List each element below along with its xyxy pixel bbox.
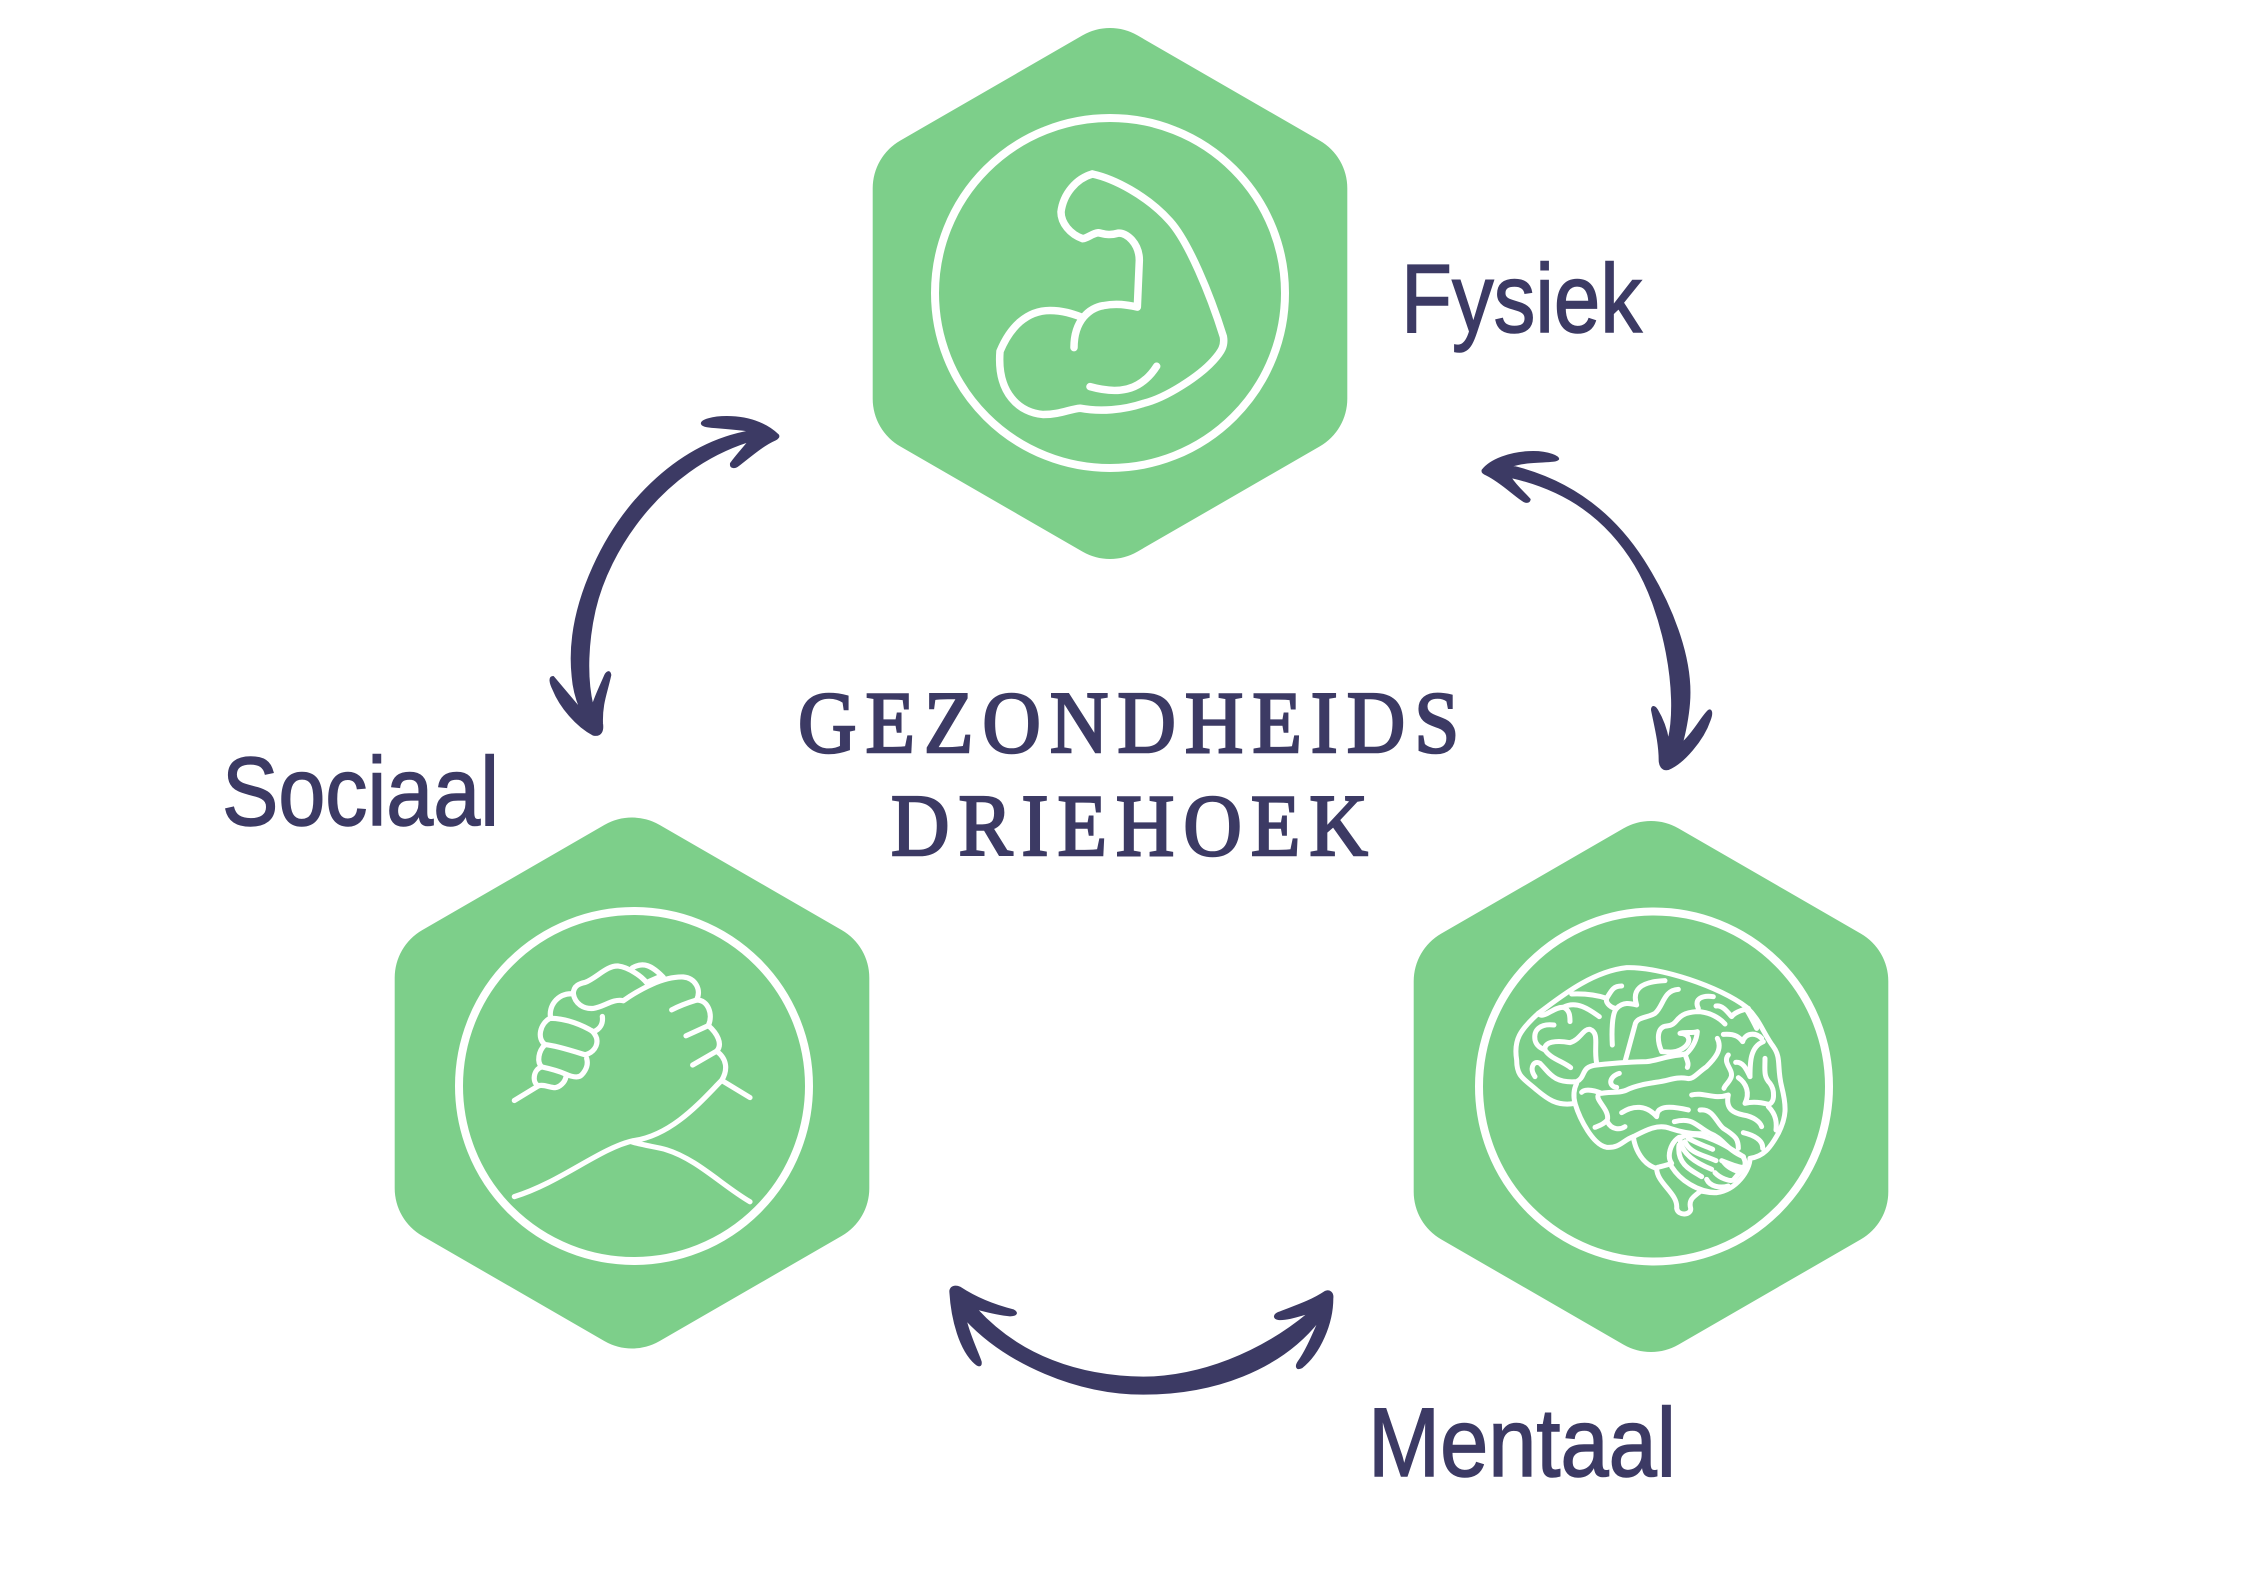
panel: Mentaal <box>1414 821 1888 1352</box>
hexagon: Sociaal <box>395 818 869 1348</box>
hexagon: Fysiek <box>873 28 1347 559</box>
title <box>798 675 1468 875</box>
label: Fysiek: Fysiek <box>1401 244 1642 353</box>
title line 2: DRIEHOEK <box>891 778 1377 875</box>
icon: clasped hands <box>514 965 750 1202</box>
panel: Fysiek <box>873 28 1347 559</box>
icon: flexed muscle arm <box>1000 174 1224 415</box>
title line 1: GEZONDHEIDS <box>798 675 1468 772</box>
panel: Sociaal <box>395 818 869 1348</box>
arrow: Sociaal to Fysiek <box>550 417 779 735</box>
ring: Fysiek <box>935 118 1285 468</box>
ring: Sociaal <box>459 911 809 1261</box>
arrow: Fysiek to Mentaal <box>1482 452 1712 770</box>
label: Mentaal: Mentaal <box>1368 1388 1676 1497</box>
label: Sociaal: Sociaal <box>222 737 499 846</box>
arrow: Sociaal to Mentaal <box>950 1286 1333 1394</box>
ring: Mentaal <box>1479 912 1829 1262</box>
icon: brain <box>1516 968 1785 1214</box>
hexagon: Mentaal <box>1414 821 1888 1352</box>
